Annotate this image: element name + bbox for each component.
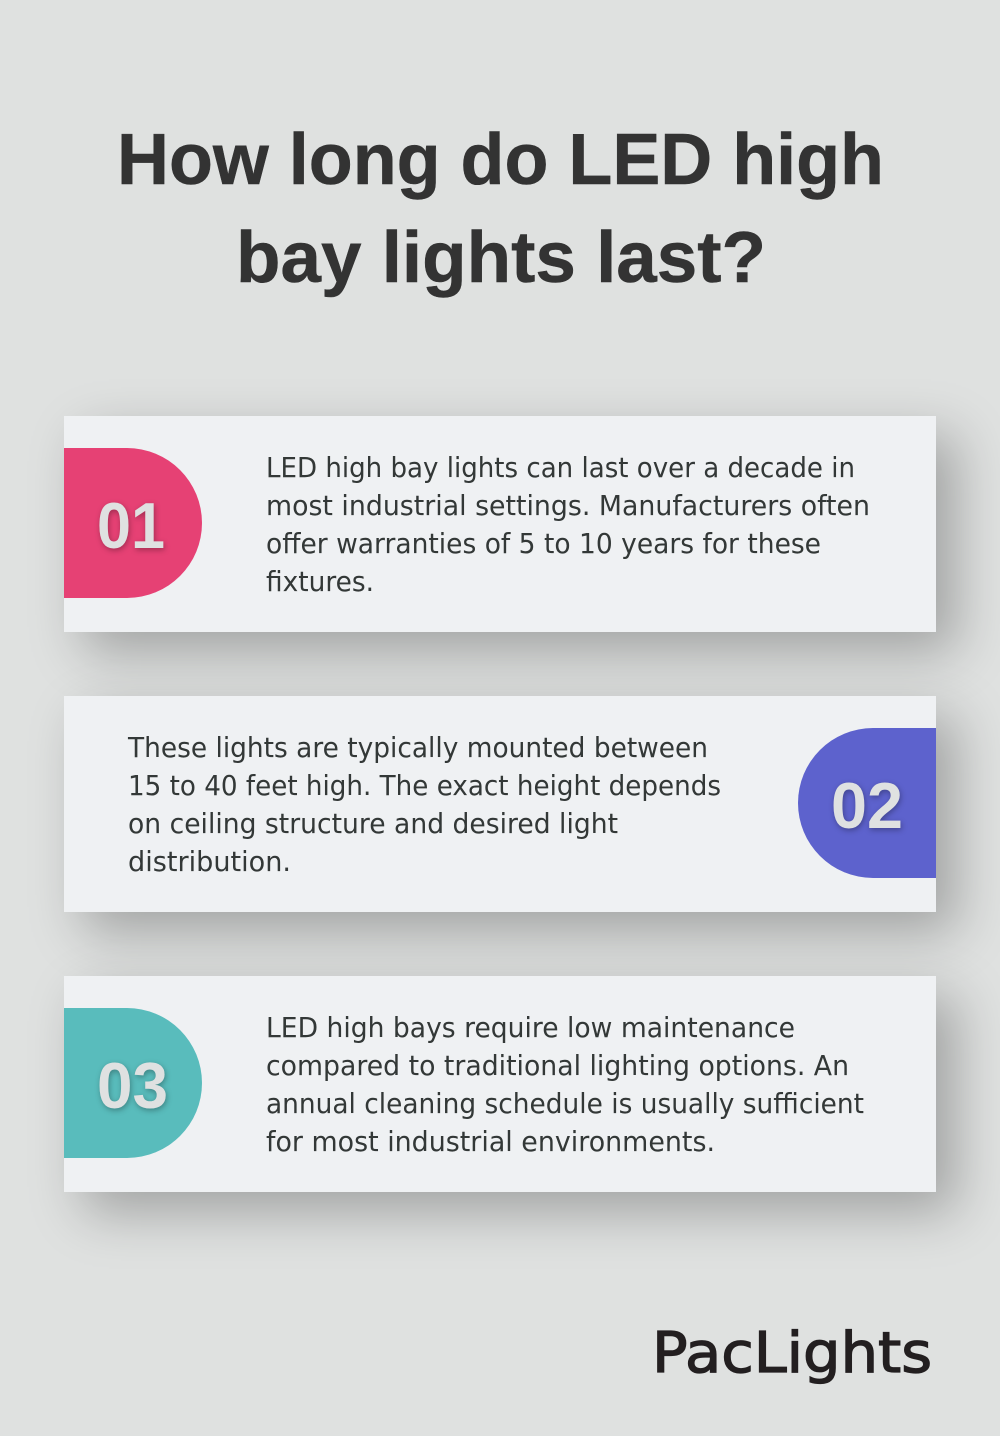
title: How long do LED high: [117, 120, 884, 200]
text block: card 02: distribution.: [128, 846, 291, 878]
badge: 01: [64, 448, 202, 598]
panel: card 03: [64, 976, 936, 1192]
text block: card 01: offer warranties of 5 to 10 years for these: [266, 528, 821, 560]
logo: PacLights: PacLights: [652, 1321, 932, 1386]
text block: card 02: [127, 732, 721, 878]
title: bay lights last?: [236, 218, 766, 298]
text block: card 01: fixtures.: [266, 566, 374, 598]
text block: card 03: for most industrial environments.: [266, 1126, 715, 1158]
text block: card 03: LED high bays require low maintenance: [266, 1012, 795, 1044]
text block: card 02: 15 to 40 feet high. The exact height depends: [128, 770, 721, 802]
text block: card 03: compared to traditional lighting options. An: [266, 1050, 849, 1082]
text block: card 01: [266, 452, 870, 598]
text block: card 03: annual cleaning schedule is usually sufficient: [266, 1088, 864, 1120]
text block: card 01: LED high bay lights can last over a decade in: [266, 452, 855, 484]
badge: 03: 03: [97, 1049, 168, 1122]
text block: card 02: These lights are typically mounted between: [127, 732, 708, 764]
badge: 02: 02: [831, 769, 903, 842]
badge: 02: [798, 728, 936, 878]
panel: card 01: [64, 416, 936, 632]
text block: card 01: most industrial settings. Manufacturers often: [266, 490, 870, 522]
title: [117, 120, 884, 298]
panel: card 02: [64, 696, 936, 912]
badge: 03: [64, 1008, 202, 1158]
badge: 01: 01: [97, 489, 165, 562]
text block: card 02: on ceiling structure and desired light: [128, 808, 618, 840]
text block: card 03: [266, 1012, 864, 1158]
